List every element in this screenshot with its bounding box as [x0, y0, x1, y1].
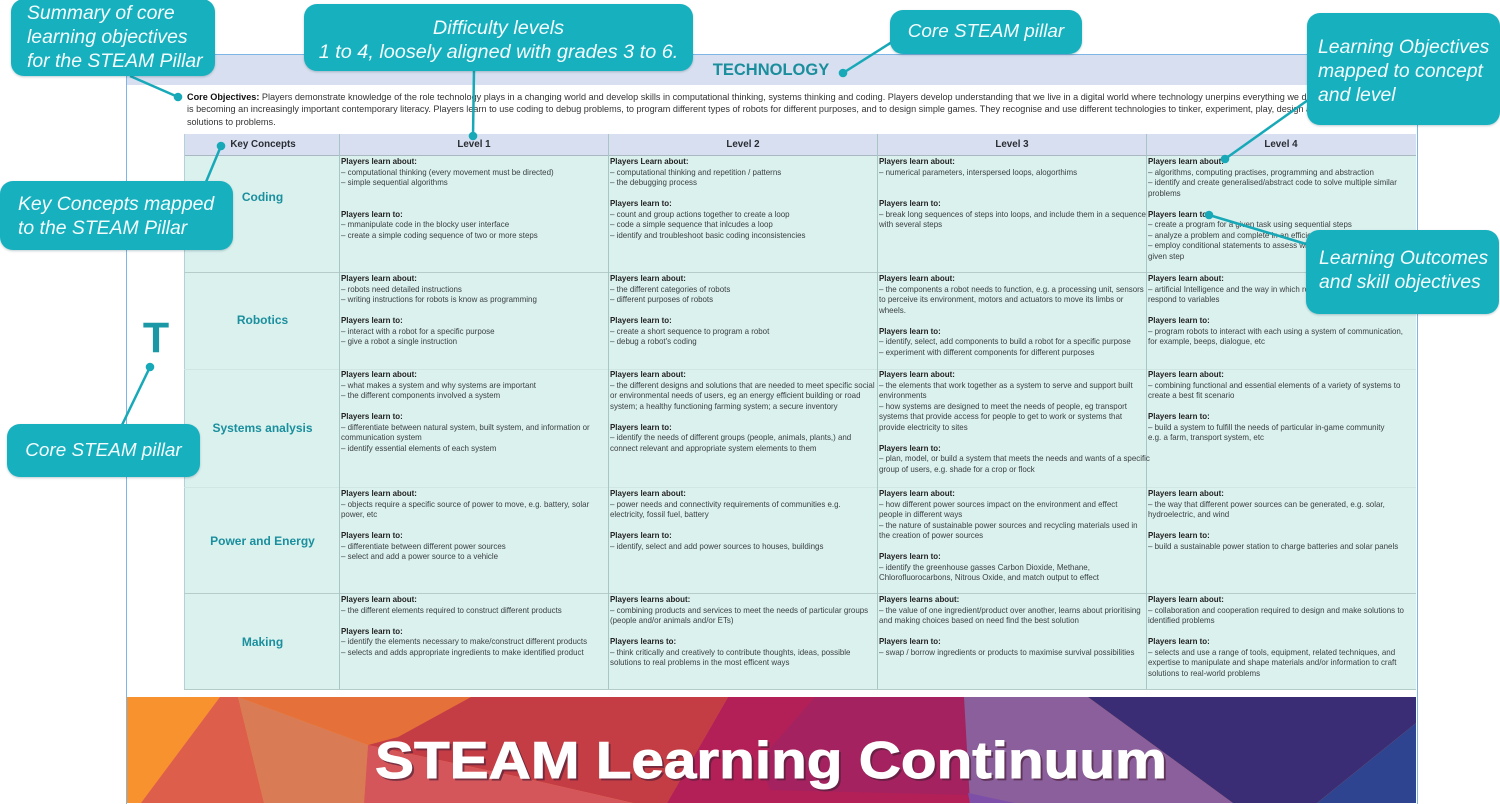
robotics level 4: – artificial Intelligence and the way in which robots can	[1148, 285, 1339, 294]
systems level 2: – identify the needs of different groups (people, animals, plants,) and	[610, 433, 851, 442]
coding level 1: – create a simple coding sequence of two or more steps	[341, 231, 538, 240]
making level 4: – selects and use a range of tools, equipment, related techniques, and	[1148, 648, 1395, 657]
systems level 2: Players learn to:	[610, 423, 672, 432]
callout: learning outcomes: Learning Outcomes	[1319, 247, 1488, 269]
systems level 4	[1148, 370, 1400, 442]
footer banner	[127, 697, 1416, 803]
systems level 1: – what makes a system and why systems are important	[341, 381, 536, 390]
robotics level 4: Players learn about:	[1148, 274, 1224, 283]
power level 1	[341, 489, 590, 561]
robotics level 1: Players learn to:	[341, 316, 403, 325]
robotics level 4	[1148, 274, 1403, 346]
systems level 3: group of users, e.g. shade for a crop or flock	[879, 465, 1035, 474]
coding level 2: Players Learn about:	[610, 157, 689, 166]
coding level 1: – simple sequential algorithms	[341, 178, 448, 187]
systems level 4: create a best fit scenario	[1148, 391, 1234, 400]
power level 2: electricity, fossil fuel, battery	[610, 510, 709, 519]
power level 1: – objects require a specific source of power to move, e.g. battery, solar	[341, 500, 589, 509]
making level 2: – combining products and services to meet the needs of particular groups	[610, 606, 868, 615]
coding level 1: Players learn to:	[341, 210, 403, 219]
coding level 3	[879, 157, 1146, 229]
connector: core pillar top	[839, 42, 892, 77]
making level 2: – think critically and creatively to contribute thoughts, ideas, possible	[610, 648, 850, 657]
callout: learning objectives	[1307, 13, 1500, 125]
making level 3: – swap / borrow ingredients or products to maximise survival possibilities	[879, 648, 1134, 657]
robotics level 3	[879, 274, 1144, 357]
systems level 1: – the different components involved a system	[341, 391, 500, 400]
systems level 3: Players learn to:	[879, 444, 941, 453]
making level 4: Players learn about:	[1148, 595, 1224, 604]
power level 3: – how different power sources impact on the environment and effect	[879, 500, 1117, 509]
making level 4: identified problems	[1148, 616, 1215, 625]
robotics level 1: – writing instructions for robots is know as programming	[341, 295, 537, 304]
callout: key concepts: Key Concepts mapped	[18, 193, 214, 215]
power level 4: hydroelectric, and wind	[1148, 510, 1229, 519]
robotics level 2: – debug a robot's coding	[610, 337, 697, 346]
power level 4	[1148, 489, 1398, 551]
systems level 1: communication system	[341, 433, 422, 442]
coding level 3: – break long sequences of steps into loops, and include them in a sequence	[879, 210, 1146, 219]
making level 2	[610, 595, 868, 667]
callout: key concepts: to the STEAM Pillar	[18, 217, 187, 239]
systems level 2: – the different designs and solutions that are needed to meet specific social	[610, 381, 875, 390]
pillar title band	[127, 55, 1416, 85]
making level 4: Players learn to:	[1148, 637, 1210, 646]
coding level 4: Players learn about:	[1148, 157, 1224, 166]
power level 2: Players learn to:	[610, 531, 672, 540]
robotics level 2: – the different categories of robots	[610, 285, 730, 294]
callout: core STEAM pillar left: Core STEAM pillar	[25, 440, 182, 461]
power level 1: Players learn about:	[341, 489, 417, 498]
making level 3: Players learns about:	[879, 595, 959, 604]
callout: learning objectives: mapped to concept	[1318, 60, 1483, 82]
connector: learning objectives	[1221, 100, 1308, 163]
making level 2: Players learns to:	[610, 637, 676, 646]
robotics level 2: – create a short sequence to program a robot	[610, 327, 769, 336]
header: key concepts: Key Concepts	[230, 139, 296, 150]
concept: robotics: Robotics	[237, 313, 288, 327]
power level 1: – differentiate between different power sources	[341, 542, 506, 551]
robotics level 3: – identify, select, add components to build a robot for a specific purpose	[879, 337, 1131, 346]
systems level 3: environments	[879, 391, 927, 400]
coding level 1: – mmanipulate code in the blocky user interface	[341, 220, 509, 229]
robotics level 4: respond to variables	[1148, 295, 1219, 304]
callout: summary of core learning objectives	[11, 0, 215, 76]
making level 2: (people and/or animals and/or ETs)	[610, 616, 734, 625]
systems level 2: system; a healthy functioning farming system; a secure inventory	[610, 402, 838, 411]
coding level 4: – employ conditional statements to assess what happens at a	[1148, 241, 1364, 250]
callout: learning objectives: and level	[1318, 84, 1396, 106]
header: level 3: Level 3	[995, 139, 1029, 150]
core objectives text: is becoming an increasingly important contemporary literacy. Players learn to use coding to debug problems, to program different types of robots for different purposes, and to design simple games. They recognise and use different technologies to tinker, experiment, play, design and find	[187, 104, 1338, 114]
making level 3: – the value of one ingredient/product over another, learns about prioritising	[879, 606, 1141, 615]
coding level 2: – identify and troubleshoot basic coding inconsistencies	[610, 231, 805, 240]
coding level 2: – computational thinking and repetition / patterns	[610, 168, 781, 177]
callout: summary of core learning objectives: for the STEAM Pillar	[27, 50, 203, 72]
power level 4: – build a sustainable power station to charge batteries and solar panels	[1148, 542, 1398, 551]
robotics level 2	[610, 274, 770, 346]
coding level 3: Players learn to:	[879, 199, 941, 208]
power level 2: – identify, select and add power sources to houses, buildings	[610, 542, 823, 551]
robotics level 2: – different purposes of robots	[610, 295, 713, 304]
robotics level 4: for example, beeps, dialogue, etc	[1148, 337, 1265, 346]
robotics level 1: Players learn about:	[341, 274, 417, 283]
concept: coding: Coding	[242, 190, 283, 204]
robotics level 1: – interact with a robot for a specific purpose	[341, 327, 495, 336]
systems level 2: connect relevant and appropriate system elements to them	[610, 444, 816, 453]
header: level 4: Level 4	[1264, 139, 1298, 150]
coding level 4: Players learn to:	[1148, 210, 1210, 219]
coding level 2: – code a simple sequence that inlcudes a loop	[610, 220, 773, 229]
robotics level 3: – experiment with different components for different purposes	[879, 348, 1094, 357]
making level 2: Players learns about:	[610, 595, 690, 604]
coding level 2	[610, 157, 806, 240]
concept: making: Making	[242, 635, 283, 649]
making level 3	[879, 595, 1141, 657]
power level 3: Players learn about:	[879, 489, 955, 498]
callout: key concepts	[0, 181, 233, 250]
systems level 2: or environmental needs of users, eg an energy efficient building or road	[610, 391, 860, 400]
systems level 1: – differentiate between natural system, built system, and information or	[341, 423, 590, 432]
core objectives text: Core Objectives: Players demonstrate knowledge of the role technology plays in a changing world and develop skills in computational thinking, systems thinking and coding. Players develop understanding that we live in a digital world where technology unerpins everything we do. Coding	[187, 92, 1346, 102]
systems level 2: Players learn about:	[610, 370, 686, 379]
making level 3: Players learn to:	[879, 637, 941, 646]
systems level 3	[879, 370, 1150, 474]
power level 2: Players learn about:	[610, 489, 686, 498]
making level 3: and making choices based on need find the best solution	[879, 616, 1079, 625]
robotics level 1	[341, 274, 537, 346]
making level 1: Players learn to:	[341, 627, 403, 636]
robotics level 1: – give a robot a single instruction	[341, 337, 457, 346]
robotics level 2: Players learn to:	[610, 316, 672, 325]
power level 1: power, etc	[341, 510, 377, 519]
core objectives text: solutions to problems.	[187, 117, 276, 127]
making level 4	[1148, 595, 1404, 678]
callout: difficulty levels: 1 to 4, loosely aligned with grades 3 to 6.	[319, 41, 678, 63]
connector: learning outcomes	[1205, 211, 1306, 244]
systems level 4: Players learn about:	[1148, 370, 1224, 379]
coding level 2: Players learn to:	[610, 199, 672, 208]
table header band	[184, 134, 1416, 156]
power level 1: – select and add a power source to a vehicle	[341, 552, 498, 561]
power level 4: Players learn about:	[1148, 489, 1224, 498]
header: level 2: Level 2	[726, 139, 760, 150]
making level 2: solutions to real problems in the most efficent ways	[610, 658, 789, 667]
concept: systems analysis: Systems analysis	[212, 421, 313, 435]
robotics level 3: – the components a robot needs to function, e.g. a processing unit, sensors	[879, 285, 1144, 294]
making level 1: – selects and adds appropriate ingredients to make identified product	[341, 648, 584, 657]
systems level 3: provide electricity to sites	[879, 423, 968, 432]
systems level 4: Players learn to:	[1148, 412, 1210, 421]
power level 3: – identify the greenhouse gasses Carbon Dioxide, Methane,	[879, 563, 1090, 572]
power level 2: – power needs and connectivity requirements of communities e.g.	[610, 500, 841, 509]
power level 1: Players learn to:	[341, 531, 403, 540]
robotics level 2: Players learn about:	[610, 274, 686, 283]
systems level 1	[341, 370, 590, 453]
power level 3: the creation of power sources	[879, 531, 983, 540]
power level 4: Players learn to:	[1148, 531, 1210, 540]
power level 2	[610, 489, 841, 551]
core objectives text	[187, 92, 1346, 127]
callout: core STEAM pillar left	[7, 424, 200, 477]
systems level 1: – identify essential elements of each system	[341, 444, 496, 453]
banner title: STEAM Learning Continuum	[375, 732, 1167, 790]
systems level 3: – plan, model, or build a system that meets the needs and wants of a specific	[879, 454, 1150, 463]
robotics level 3: Players learn to:	[879, 327, 941, 336]
systems level 3: – the elements that work together as a system to serve and support built	[879, 381, 1133, 390]
coding level 4: – create a program for a given task using sequential steps	[1148, 220, 1352, 229]
systems level 4: – build a system to fulfill the needs of particular in-game community	[1148, 423, 1384, 432]
power level 3: people in different ways	[879, 510, 962, 519]
callout: learning objectives: Learning Objectives	[1318, 36, 1489, 58]
coding level 4: – identify and create generalised/abstract code to solve multiple similar	[1148, 178, 1397, 187]
making level 1: – the different elements required to construct different products	[341, 606, 562, 615]
systems level 2	[610, 370, 875, 453]
callout: core STEAM pillar top: Core STEAM pillar	[908, 21, 1064, 42]
header: level 1: Level 1	[457, 139, 491, 150]
power level 4: – the way that different power sources can be generated, e.g. solar,	[1148, 500, 1385, 509]
making level 4: – collaboration and cooperation required to design and make solutions to	[1148, 606, 1404, 615]
robotics level 1: – robots need detailed instructions	[341, 285, 462, 294]
coding level 4: problems	[1148, 189, 1181, 198]
making level 1	[341, 595, 587, 657]
power level 3: Players learn to:	[879, 552, 941, 561]
coding level 4	[1148, 157, 1397, 261]
coding level 3: – numerical parameters, interspersed loops, alogorthims	[879, 168, 1077, 177]
concept: power and energy: Power and Energy	[210, 534, 315, 548]
coding level 3: with several steps	[879, 220, 942, 229]
power level 3	[879, 489, 1138, 582]
coding level 1	[341, 157, 554, 240]
making level 1: – identify the elements necessary to make/construct different products	[341, 637, 587, 646]
systems level 4: e.g. a farm, transport system, etc	[1148, 433, 1264, 442]
coding level 3: Players learn about:	[879, 157, 955, 166]
callout: core STEAM pillar top	[890, 10, 1082, 54]
systems level 3: – how systems are designed to meet the needs of people, eg transport	[879, 402, 1127, 411]
pillar letter T: T	[143, 314, 169, 362]
callout: difficulty levels	[304, 4, 693, 71]
coding level 4: – analyze a problem and complete in an efficient way	[1148, 231, 1334, 240]
robotics level 3: wheels.	[879, 306, 906, 315]
connector: summary	[130, 76, 182, 101]
systems level 3: systems that provide access for people to get to work or systems that	[879, 412, 1122, 421]
systems level 1: Players learn to:	[341, 412, 403, 421]
callout: learning outcomes: and skill objectives	[1319, 271, 1481, 293]
connector: key concepts	[206, 142, 225, 182]
coding level 4: given step	[1148, 252, 1184, 261]
robotics level 4: Players learn to:	[1148, 316, 1210, 325]
banner title: STEAM Learning Continuum	[377, 734, 1169, 792]
making level 4: solutions to real-world problems	[1148, 669, 1260, 678]
power level 3: – the nature of sustainable power sources and recycling materials used in	[879, 521, 1138, 530]
callout: summary of core learning objectives: learning objectives	[27, 26, 188, 48]
power level 3: Chlorofluorocarbons, Nitrous Oxide, and match output to effect	[879, 573, 1099, 582]
coding level 2: – the debugging process	[610, 178, 697, 187]
coding level 4: – algorithms, computing practises, programming and abstraction	[1148, 168, 1374, 177]
pillar title band: TECHNOLOGY	[713, 61, 829, 79]
coding level 1: Players learn about:	[341, 157, 417, 166]
making level 1: Players learn about:	[341, 595, 417, 604]
robotics level 3: to perceive its environment, motors and actuators to move its limbs or	[879, 295, 1123, 304]
callout: difficulty levels: Difficulty levels	[433, 17, 564, 39]
systems level 3: Players learn about:	[879, 370, 955, 379]
systems level 4: – combining functional and essential elements of a variety of systems to	[1148, 381, 1400, 390]
curriculum table	[184, 134, 1416, 690]
robotics level 3: Players learn about:	[879, 274, 955, 283]
callout: summary of core learning objectives: Summary of core	[27, 2, 175, 24]
systems level 1: Players learn about:	[341, 370, 417, 379]
coding level 1: – computational thinking (every movement must be directed)	[341, 168, 554, 177]
coding level 2: – count and group actions together to create a loop	[610, 210, 790, 219]
robotics level 4: – program robots to interact with each using a system of communication,	[1148, 327, 1403, 336]
callout: learning outcomes	[1306, 230, 1499, 314]
connector: difficulty	[469, 70, 477, 140]
making level 4: expertise to manipulate and shape materials and/or information to craft	[1148, 658, 1396, 667]
connector: pillar letter	[122, 363, 154, 425]
